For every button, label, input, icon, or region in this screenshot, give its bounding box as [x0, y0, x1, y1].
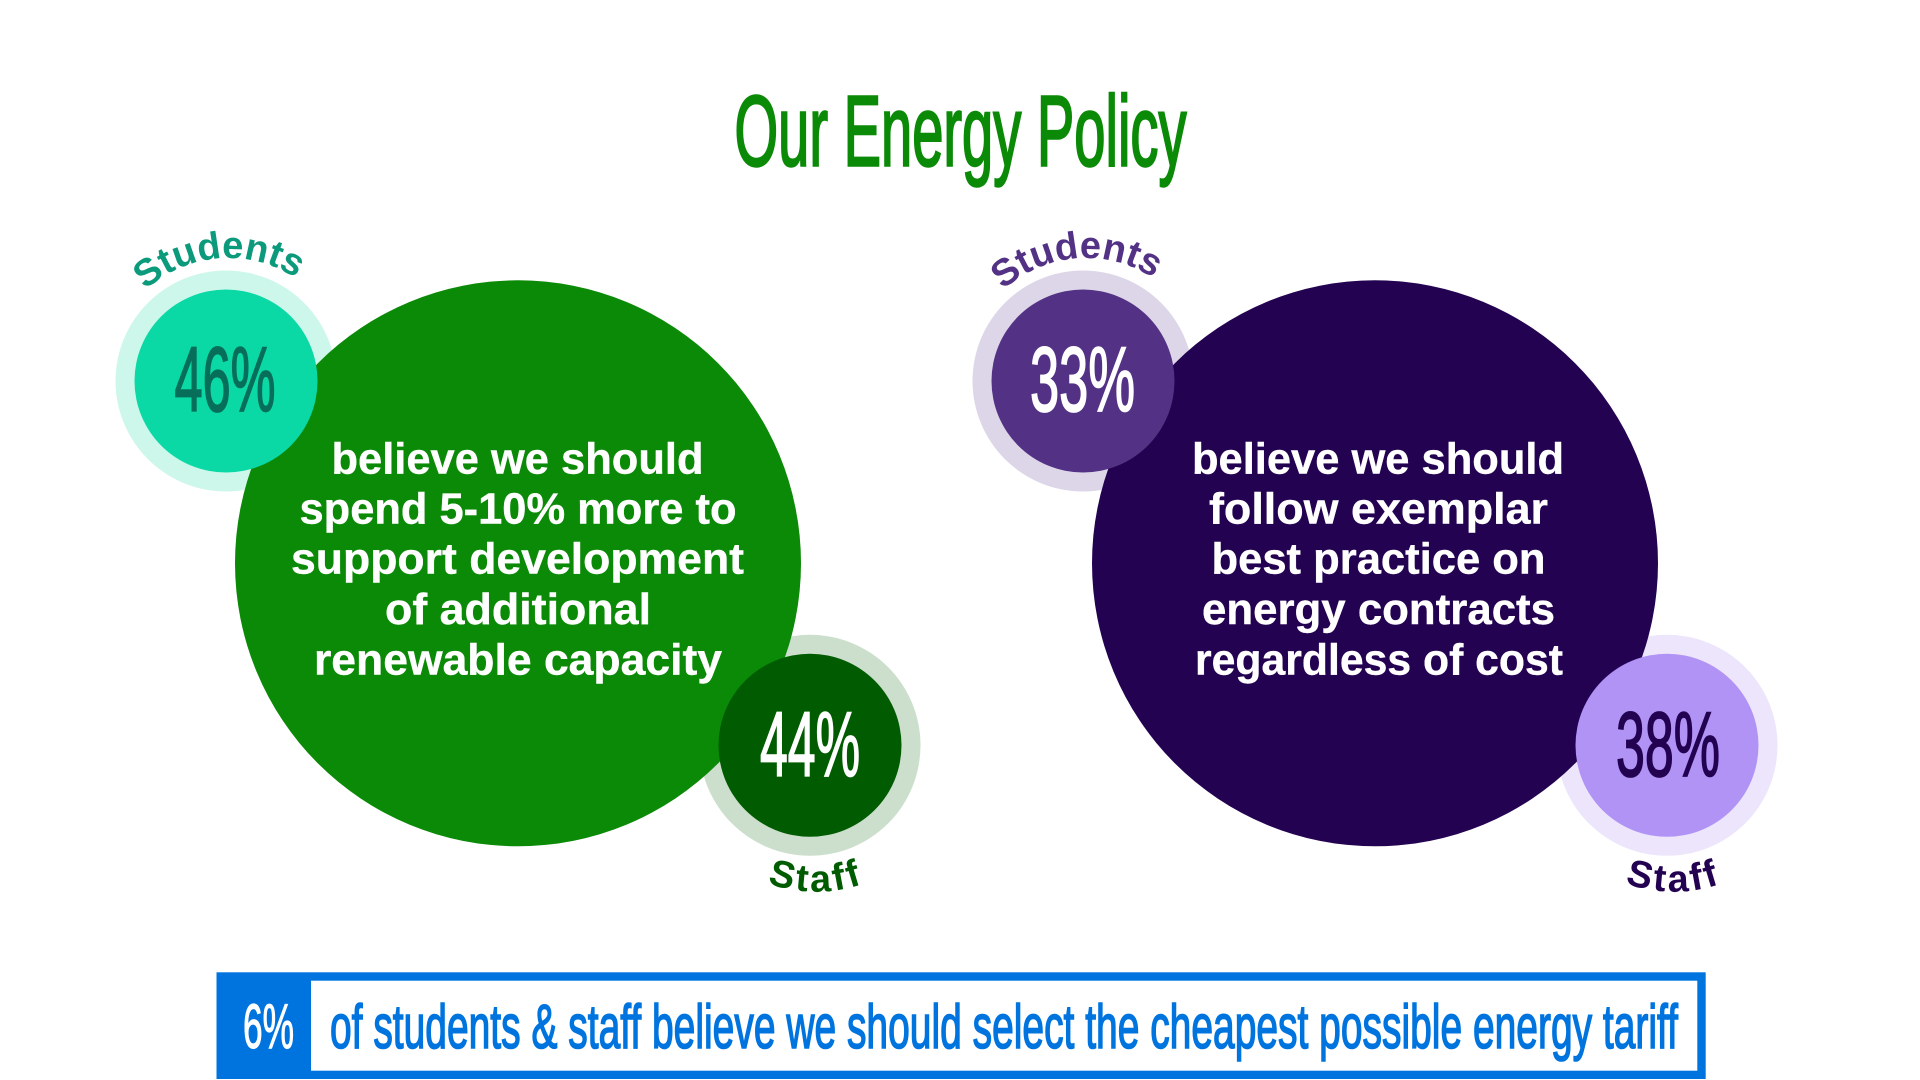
statement text: renewable capacity	[314, 636, 723, 684]
callout bar: cheapest tariff	[216, 972, 1706, 1079]
halo: staff	[700, 635, 920, 856]
label: staff: Staff	[1628, 858, 1716, 892]
halo: students	[972, 270, 1194, 492]
stat: 6%: 6%	[243, 992, 294, 1062]
statement text: support development	[291, 534, 744, 584]
stat: students 33%: 33%	[1030, 329, 1135, 431]
statement text: energy contracts	[1202, 585, 1555, 634]
statement text	[1192, 434, 1564, 684]
title: Our Energy Policy	[734, 76, 1186, 188]
circle: staff	[718, 654, 902, 837]
label: students: Students	[134, 230, 302, 286]
statement text: best practice on	[1212, 534, 1546, 584]
halo: staff	[1556, 635, 1778, 856]
statement text: believe we should	[332, 434, 704, 484]
panel: renewable capacity support	[116, 230, 920, 892]
statement text: believe we should	[1192, 434, 1564, 484]
statement text	[291, 434, 744, 684]
circle: staff	[1576, 654, 1758, 837]
label: staff: Staff	[770, 858, 858, 892]
circle: students	[992, 290, 1174, 472]
statement text: regardless of cost	[1195, 636, 1563, 684]
stat: students 46%: 46%	[174, 329, 276, 431]
main green circle	[235, 280, 801, 846]
bar frame	[216, 972, 1706, 1079]
statement text: follow exemplar	[1209, 484, 1548, 534]
bar inner panel	[311, 981, 1697, 1071]
statement text: spend 5-10% more to	[300, 484, 736, 534]
circle: students	[134, 290, 318, 472]
main purple circle	[1092, 280, 1658, 846]
stat: staff 38%: 38%	[1616, 694, 1720, 796]
panel: exemplar best practice	[972, 230, 1778, 892]
stat: staff 44%: 44%	[760, 694, 860, 796]
statement text: of additional	[385, 585, 651, 634]
label: students: Students	[992, 230, 1160, 286]
halo: students	[116, 270, 336, 492]
